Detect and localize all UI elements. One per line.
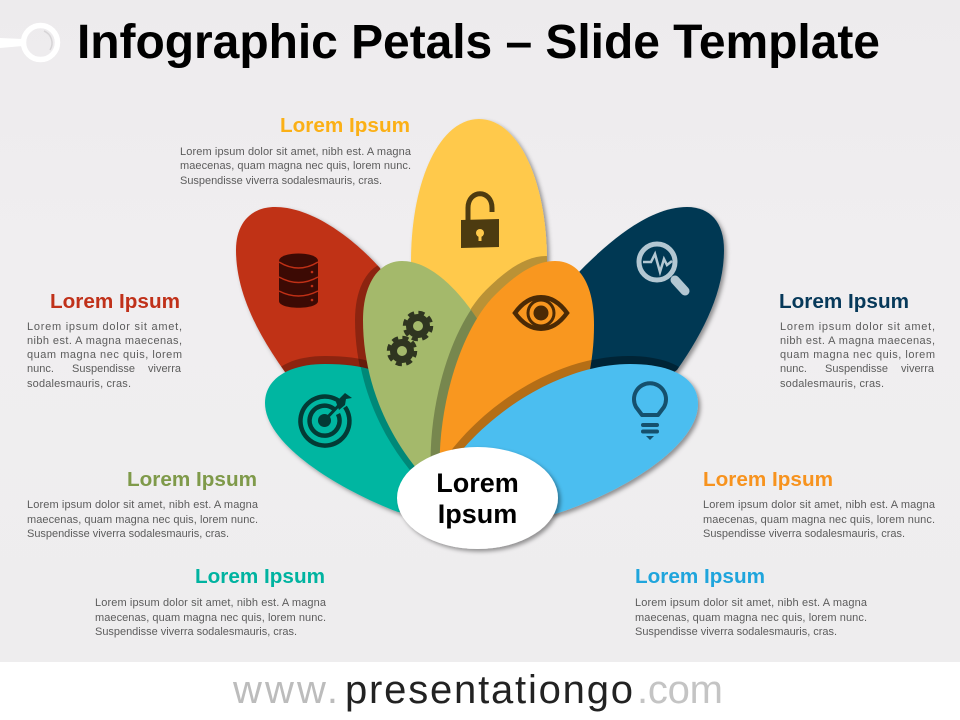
petal: teal (265, 364, 440, 515)
text block: red: Lorem ipsum dolor sit amet, (27, 321, 182, 333)
text block: orange (703, 468, 936, 540)
footer url: .com (637, 668, 723, 712)
icon: target with arrow (300, 393, 352, 446)
text block: red: sodalesmauris, cras. (27, 378, 131, 390)
text block: yellow: Lorem Ipsum (280, 114, 410, 137)
icon: gears (389, 313, 431, 364)
petal: blue (440, 364, 698, 514)
text block: green: Suspendisse viverra sodalesmauris, cras. (27, 528, 229, 540)
shadow band: green on red (355, 266, 380, 369)
text block: red: quam magna nec quis, lorem (27, 349, 182, 361)
text block: green (27, 468, 259, 540)
text block: green: Lorem ipsum dolor sit amet, nibh est. A magna (27, 499, 259, 511)
header ring icon (0, 26, 58, 60)
text block: navy: quam magna nec quis, lorem (780, 349, 935, 361)
text block: blue: maecenas, quam magna nec quis, lorem nunc. (635, 612, 867, 624)
text block: green: Lorem Ipsum (127, 468, 257, 491)
text block: navy: viverra (901, 363, 935, 375)
text block: navy (779, 290, 935, 390)
text block: red: Suspendisse (72, 363, 135, 375)
shadow band: orange on green (430, 310, 477, 456)
title: Infographic Petals – Slide Template (77, 16, 880, 69)
text block: red: nibh est. A magna maecenas, (27, 335, 182, 347)
shadow band: blue on orange (452, 360, 592, 450)
text block: teal: Lorem Ipsum (195, 565, 325, 588)
text block: blue: Lorem ipsum dolor sit amet, nibh est. A magna (635, 597, 868, 609)
text block: yellow: Lorem ipsum dolor sit amet, nibh est. A magna (180, 146, 412, 158)
footer url: presentationgo (345, 668, 633, 712)
text block: navy: nibh est. A magna maecenas, (780, 335, 935, 347)
text block: red: nunc. (27, 363, 54, 375)
text block: orange: Suspendisse viverra sodalesmauris, cras. (703, 528, 905, 540)
text block: orange: maecenas, quam magna nec quis, lorem nunc. (703, 514, 935, 526)
petal: red (236, 207, 478, 510)
text block: navy: Lorem Ipsum (779, 290, 909, 313)
text block: red: Lorem Ipsum (50, 290, 180, 313)
text block: blue: Lorem Ipsum (635, 565, 765, 588)
shadow band: orange on yellow (470, 256, 547, 318)
text block: green: maecenas, quam magna nec quis, lorem nunc. (27, 514, 258, 526)
icon: open padlock (461, 194, 499, 248)
text block: yellow (180, 114, 412, 187)
text block: orange: Lorem ipsum dolor sit amet, nibh est. A magna (703, 499, 936, 511)
footer url: www. (232, 668, 338, 712)
shadow band: blue on navy (590, 356, 679, 372)
icon: eye (515, 297, 567, 329)
text block: teal (95, 565, 327, 638)
petal: yellow (411, 119, 547, 480)
text block: navy: Lorem ipsum dolor sit amet, (780, 321, 935, 333)
text block: red: viverra (148, 363, 182, 375)
text block: orange: Lorem Ipsum (703, 468, 833, 491)
center ellipse (397, 447, 558, 549)
center ellipse: Ipsum (438, 499, 517, 529)
shadow band: green on teal (360, 367, 414, 470)
petal: orange (440, 261, 594, 480)
text block: teal: Suspendisse viverra sodalesmauris, cras. (95, 626, 297, 638)
icon: magnifier with pulse (639, 244, 685, 291)
text block: yellow: Suspendisse viverra sodalesmauris, cras. (180, 175, 382, 187)
center label: Lorem (436, 468, 519, 498)
text block: blue: Suspendisse viverra sodalesmauris, cras. (635, 626, 837, 638)
icon: light bulb (634, 383, 666, 440)
footer url (232, 668, 723, 712)
petal: navy (478, 207, 724, 510)
text block: navy: sodalesmauris, cras. (780, 378, 884, 390)
text block: navy: nunc. (780, 363, 807, 375)
text block: teal: Lorem ipsum dolor sit amet, nibh est. A magna (95, 597, 327, 609)
footer band (0, 662, 960, 720)
shadow band: teal on red (281, 356, 368, 372)
text block: navy: Suspendisse (825, 363, 888, 375)
text block: blue (635, 565, 868, 638)
text block: red (27, 290, 182, 390)
petal flower (236, 119, 724, 515)
icon: database (279, 254, 318, 308)
petal: green (363, 261, 487, 490)
text block: teal: maecenas, quam magna nec quis, lorem nunc. (95, 612, 326, 624)
text block: yellow: maecenas, quam magna nec quis, lorem nunc. (180, 160, 411, 172)
